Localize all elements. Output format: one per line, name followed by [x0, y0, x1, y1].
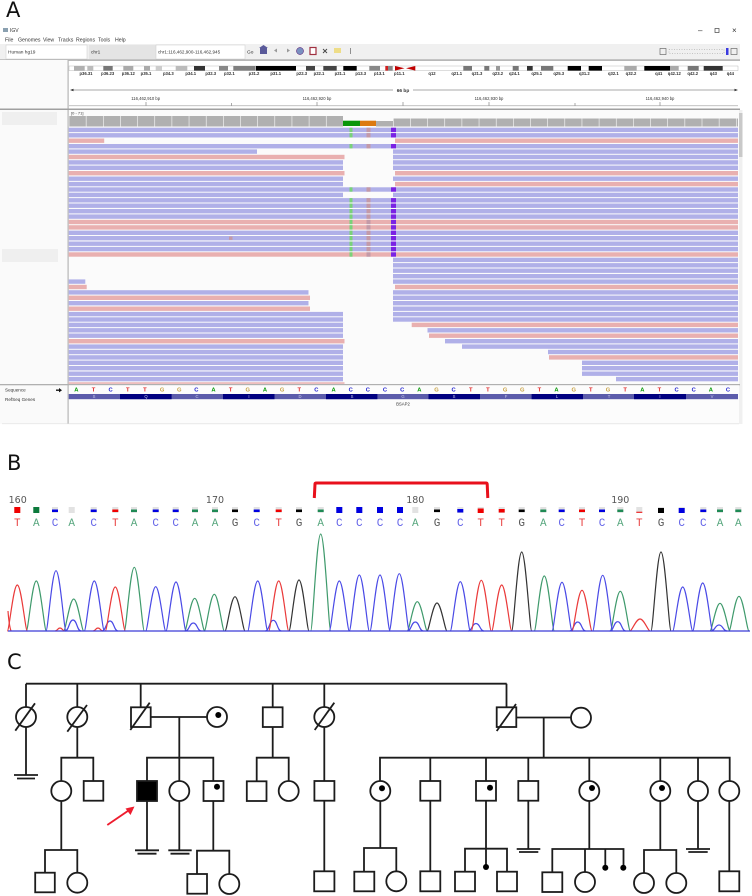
base call letters: T — [636, 518, 643, 530]
reference sequence letters: C — [726, 388, 731, 394]
reference sequence letters: T — [589, 388, 593, 394]
cytoband labels: q32.2 — [626, 71, 637, 76]
window title bar — [3, 26, 737, 35]
child: carrier female with four children — [542, 781, 626, 892]
reference sequence letters: T — [623, 388, 627, 394]
gene track with codons: I — [659, 394, 661, 399]
base call letters: G — [658, 518, 664, 530]
base call letters: C — [253, 518, 260, 530]
cytoband labels: p31.2 — [249, 71, 260, 76]
cytoband labels: q25.1 — [531, 71, 543, 76]
sequence and gene tracks: RefSeq Genes — [5, 397, 36, 402]
base call letters: A — [68, 518, 75, 530]
carrier brother and children — [187, 781, 239, 894]
cytoband labels — [79, 71, 735, 76]
child: carrier male with children — [455, 781, 517, 891]
sequence and gene tracks: Sequence — [5, 388, 26, 392]
toolbar: Human hg19 — [8, 50, 36, 56]
reference sequence letters: C — [314, 388, 319, 394]
base call letters: T — [579, 518, 586, 530]
gene track with codons: T — [608, 394, 611, 399]
base call letters: C — [700, 518, 707, 530]
gene track with codons: C — [195, 394, 199, 399]
reference sequence letters: C — [400, 388, 405, 394]
reference sequence letters: A — [709, 388, 714, 394]
reference sequence letters: G — [246, 388, 251, 394]
reference sequence letters: C — [349, 388, 354, 394]
data area background — [69, 110, 739, 384]
base call letters: A — [617, 518, 624, 530]
base call letters: A — [717, 518, 724, 530]
base call letters: C — [172, 518, 179, 530]
cytoband labels: p35.1 — [141, 71, 152, 76]
base call letters: C — [599, 518, 606, 530]
child: male with son — [420, 781, 440, 891]
base call letters: A — [412, 518, 419, 530]
panel label B: B — [7, 451, 21, 475]
base call letters: T — [112, 518, 119, 530]
base position numbers: 160 — [9, 495, 27, 506]
cytoband labels: p31.1 — [270, 71, 282, 76]
gene track with codons: S — [93, 394, 96, 399]
reference sequence letters: G — [177, 388, 182, 394]
reference sequence letters: A — [74, 388, 79, 394]
base call letters: C — [377, 518, 384, 530]
cytoband labels: q41 — [655, 71, 663, 76]
base call letters: C — [356, 518, 363, 530]
base call letters: G — [518, 518, 525, 530]
branch: right family couple — [380, 684, 730, 781]
toolbar: chr1 — [91, 50, 101, 56]
base call letters: A — [33, 518, 40, 530]
base call letters: C — [52, 518, 59, 530]
cytoband labels: q21.3 — [472, 71, 483, 76]
toolbar — [0, 44, 740, 61]
gene track with codons: V — [711, 394, 714, 399]
menu bar: Help — [115, 38, 126, 44]
sequence and gene tracks: BSAP2 — [396, 402, 411, 406]
base call letters: C — [457, 518, 464, 530]
ruler with span and base positions — [0, 88, 740, 110]
base position numbers: 180 — [406, 495, 424, 506]
reference sequence letters: T — [92, 388, 96, 394]
top sibship line — [26, 683, 507, 685]
base call letters: A — [131, 518, 138, 530]
child: female without children — [686, 781, 710, 852]
electropherogram traces — [7, 534, 750, 631]
cytoband labels: p11.1 — [394, 71, 405, 76]
ruler with span and base positions: 116,462,910 bp — [131, 96, 161, 101]
chromosome ideogram — [69, 66, 738, 71]
cytoband labels: p32.1 — [224, 71, 235, 76]
base call letters: A — [317, 518, 324, 530]
branch: deceased female with son and grandson — [314, 684, 334, 891]
reference sequence letters: A — [211, 388, 216, 394]
base call letters: G — [434, 518, 440, 530]
reference sequence letters: G — [280, 388, 285, 394]
reference sequence letters: G — [571, 388, 576, 394]
gene track with codons: L — [556, 394, 559, 399]
cytoband labels: p34.3 — [163, 71, 174, 76]
cytoband labels: q44 — [727, 71, 735, 76]
reference sequence letters: C — [109, 388, 114, 394]
window title bar: IGV — [10, 28, 19, 34]
menu bar: Tracks — [58, 38, 74, 44]
reference sequence letters: A — [554, 388, 559, 394]
cytoband labels: p32.3 — [205, 71, 217, 76]
reference sequence letters: G — [520, 388, 525, 394]
reference sequence letters: T — [469, 388, 473, 394]
quality bars — [14, 507, 741, 513]
cytoband labels: q32.1 — [608, 71, 619, 76]
base call letters: G — [232, 518, 238, 530]
child: male without children — [517, 781, 540, 852]
cytoband labels: p13.1 — [374, 71, 385, 76]
reference sequence letters: C — [383, 388, 388, 394]
aligned reads — [69, 128, 738, 384]
sequence and gene tracks — [0, 384, 740, 424]
trace baseline — [8, 630, 750, 632]
reference sequence letters: A — [332, 388, 337, 394]
arrow: proband indicator — [107, 806, 134, 825]
branch: deceased female with descendants — [35, 684, 103, 893]
ruler with span and base positions: 116,462,930 bp — [475, 96, 504, 101]
gene track with codons: Q — [144, 394, 148, 399]
ruler with span and base positions: 116,462,920 bp — [303, 96, 332, 101]
menu bar: View — [43, 38, 54, 44]
base call letters: A — [735, 518, 742, 530]
reference sequence letters: T — [486, 388, 490, 394]
reference sequence letters: G — [606, 388, 611, 394]
child: carrier female with two daughters — [634, 781, 686, 893]
reference sequence letters: T — [298, 388, 302, 394]
cytoband labels: p34.1 — [185, 71, 197, 76]
base call letters: A — [540, 518, 547, 530]
cytoband labels: p36.12 — [122, 71, 135, 76]
base call letters: T — [275, 518, 282, 530]
reference sequence letters: C — [194, 388, 199, 394]
menu bar: File — [5, 38, 13, 44]
branch: male with two children — [247, 684, 299, 801]
variant marks in reads: green mismatch, mauve mismatch, purple insertion — [350, 128, 396, 257]
proband: affected male — [135, 781, 159, 854]
gene track with codons: S — [351, 394, 354, 399]
cytoband labels: q25.3 — [553, 71, 565, 76]
reference sequence letters: G — [160, 388, 165, 394]
cytoband labels: q43 — [710, 71, 718, 76]
base call letters: C — [152, 518, 159, 530]
cytoband labels: q31.2 — [579, 71, 590, 76]
cytoband labels: p13.3 — [355, 71, 367, 76]
panel label C: C — [7, 650, 22, 674]
reference sequence letters: C — [692, 388, 697, 394]
coverage track — [69, 110, 738, 126]
toolbar: Go — [247, 50, 254, 56]
base call letters: T — [498, 518, 505, 530]
reference sequence letters: T — [126, 388, 130, 394]
reference sequence letters: A — [417, 388, 422, 394]
reference sequence letters: C — [452, 388, 457, 394]
base call letters: A — [192, 518, 199, 530]
reference sequence letters: T — [143, 388, 147, 394]
reference sequence letters: T — [658, 388, 662, 394]
cytoband labels: p21.1 — [335, 71, 346, 76]
base position numbers: 190 — [611, 495, 629, 506]
reference sequence letters: T — [229, 388, 233, 394]
gene track with codons: D — [298, 394, 302, 399]
reference sequence letters: A — [640, 388, 645, 394]
cytoband labels: q42.2 — [687, 71, 699, 76]
branch: deceased female without children — [14, 684, 38, 778]
cytoband labels: q24.1 — [509, 71, 520, 76]
gene track with codons: F — [505, 394, 508, 399]
cytoband labels: p22.1 — [314, 71, 325, 76]
base call letters: C — [558, 518, 565, 530]
cytoband labels: q12 — [428, 71, 436, 76]
branch: proband's parents and siblings — [130, 684, 239, 894]
base call letters: T — [14, 518, 21, 530]
reference sequence letters: A — [263, 388, 268, 394]
coverage track: [0 - 71] — [71, 110, 83, 116]
base call letters: C — [90, 518, 97, 530]
menu bar: Regions — [76, 38, 95, 44]
cytoband labels: p22.3 — [296, 71, 308, 76]
base call letters: C — [397, 518, 404, 530]
ruler with span and base positions: 116,462,940 bp — [646, 96, 675, 101]
vertical scrollbar — [739, 110, 742, 424]
menu bar — [5, 38, 126, 44]
gene track with codons: S — [453, 394, 456, 399]
reference sequence letters: C — [366, 388, 371, 394]
panel B: Sanger chromatogram — [7, 483, 750, 631]
reference sequence letters: G — [503, 388, 508, 394]
left name panel — [0, 60, 69, 424]
cytoband labels: q23.2 — [492, 71, 504, 76]
panel A: IGV genome browser — [0, 26, 742, 424]
child: female with son — [719, 781, 739, 891]
base call letters: C — [336, 518, 343, 530]
red bracket marking deleted bases — [314, 483, 488, 498]
cytoband labels: p36.31 — [79, 71, 93, 76]
window title bar: – — [698, 26, 703, 35]
unaffected sister without children — [168, 781, 192, 854]
menu bar: Genomes — [18, 38, 41, 44]
ruler with span and base positions: 66 bp — [397, 88, 409, 94]
gene track with codons: G — [401, 394, 405, 399]
cytoband labels: q42.12 — [668, 71, 681, 76]
cytoband labels: q21.1 — [451, 71, 463, 76]
reference sequence letters: T — [538, 388, 542, 394]
base call letters: A — [212, 518, 219, 530]
child: carrier female with two children — [354, 781, 406, 891]
window title bar: × — [732, 26, 737, 35]
gene track with codons — [69, 394, 738, 399]
base position numbers: 170 — [206, 495, 224, 506]
menu bar: Tools — [98, 38, 111, 44]
toolbar: chr1:116,462,900-116,462,945 — [158, 50, 221, 54]
panel C: family pedigree — [14, 684, 739, 894]
cytoband labels: p36.23 — [101, 71, 115, 76]
base call letters: T — [477, 518, 484, 530]
reference sequence letters: G — [434, 388, 439, 394]
base call letters: G — [296, 518, 302, 530]
base position numbers — [9, 495, 629, 506]
gene track with codons: I — [248, 394, 250, 399]
base call letters: C — [678, 518, 685, 530]
reference sequence letters: C — [675, 388, 680, 394]
